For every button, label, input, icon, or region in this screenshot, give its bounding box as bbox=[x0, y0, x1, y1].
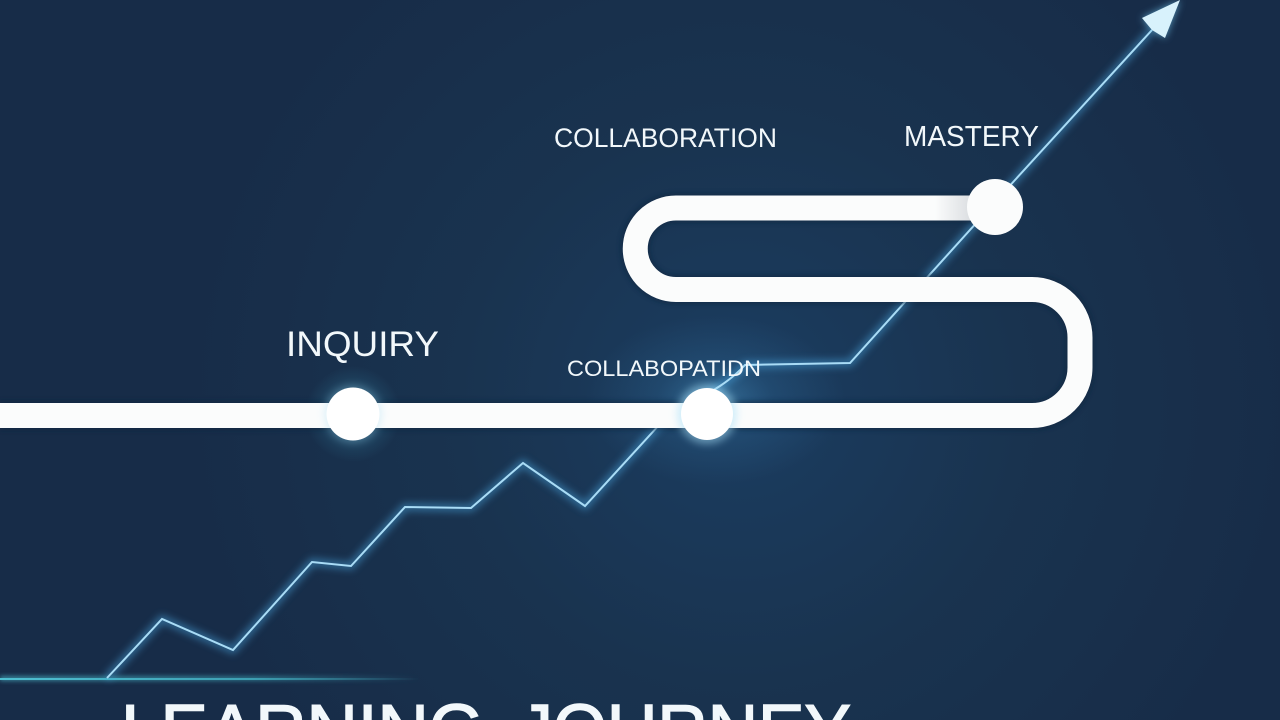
node halo: inquiry bbox=[305, 366, 401, 462]
label: inquiry: INQUIRY bbox=[286, 325, 439, 364]
title bbox=[121, 691, 851, 720]
growth line with arrow bbox=[107, 0, 1180, 678]
winding path shadow bbox=[0, 208, 1080, 416]
node: collaboration bbox=[677, 384, 737, 444]
label: collaboration upper: COLLABORATION bbox=[554, 123, 777, 153]
label: mastery: MASTERY bbox=[904, 121, 1039, 153]
node halo: collaboration bbox=[585, 315, 845, 485]
winding white path bbox=[0, 196, 1080, 416]
node: inquiry bbox=[324, 385, 382, 443]
arrowhead bbox=[1142, 0, 1180, 38]
baseline glow bbox=[0, 676, 420, 681]
node: mastery bbox=[967, 179, 1023, 235]
label: collaboration lower: COLLABOPATIDN bbox=[567, 356, 761, 381]
